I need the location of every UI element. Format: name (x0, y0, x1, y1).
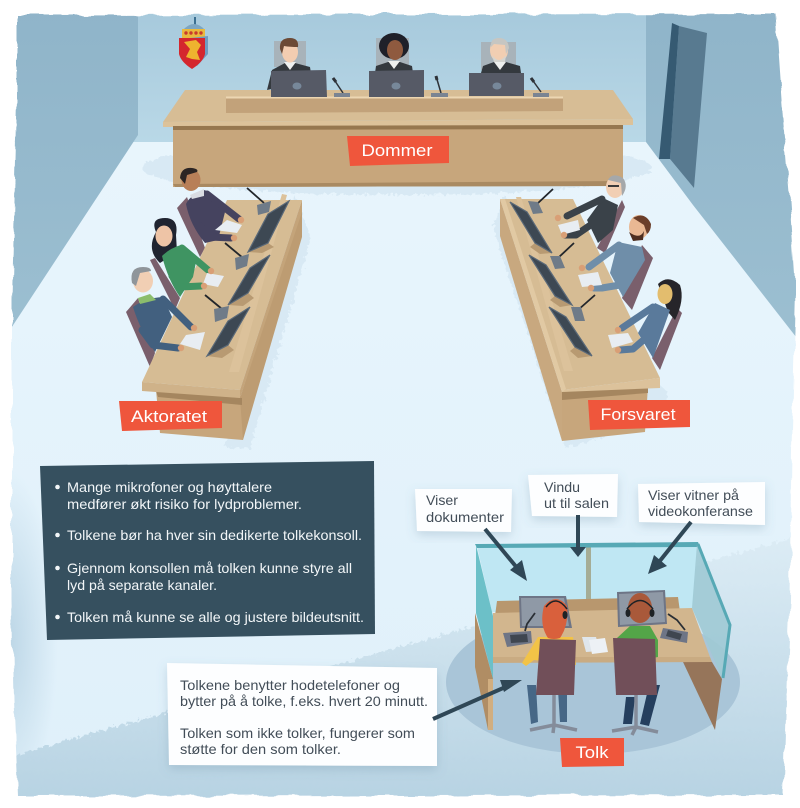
callout: interpreter routine: Tolken som ikke tolker, fungerer som (180, 725, 415, 741)
callout: video conference: videokonferanse (648, 503, 753, 519)
person 1 (180, 168, 239, 243)
microphones (528, 189, 595, 321)
label: Tolk: Tolk (576, 743, 609, 762)
prosecution chairs (126, 197, 205, 367)
person 1 (565, 175, 626, 243)
panel: key points (40, 461, 375, 640)
defence chairs (597, 200, 682, 370)
bullet list: Gjennom konsollen må tolken kunne styre all (67, 560, 352, 576)
window post (586, 547, 591, 599)
callout: video conference (638, 482, 765, 525)
label: Aktoratet (119, 401, 222, 431)
interpreter left (522, 599, 577, 733)
desk top (493, 608, 710, 657)
label: Forsvaret (588, 400, 690, 430)
table base (500, 199, 648, 441)
hands (178, 217, 244, 351)
monitor stands (530, 243, 592, 358)
divider strip (229, 194, 287, 372)
person 3 (620, 279, 682, 358)
monitors (510, 202, 592, 356)
callout: interpreter routine (167, 663, 437, 766)
callout: window: ut til salen (544, 495, 609, 511)
callout: window: Vindu (544, 479, 580, 495)
judge 2 (375, 33, 413, 73)
interpreter right (612, 593, 660, 735)
papers (180, 220, 242, 350)
console right (660, 614, 688, 643)
monitor stands (207, 243, 274, 358)
table base (156, 205, 302, 440)
glass right (692, 544, 730, 678)
label: Tolk (560, 738, 624, 767)
callout: documents: dokumenter (426, 509, 504, 525)
laptop 3 (469, 73, 524, 96)
laptop 1 (271, 70, 327, 97)
coat of arms (179, 17, 208, 69)
bullet list (55, 479, 364, 625)
label: Forsvaret: Forsvaret (600, 405, 676, 424)
arrow: interpreter routine (433, 680, 522, 719)
label: Dommer (347, 136, 449, 166)
arrow: window (570, 515, 586, 557)
label: Aktoratet: Aktoratet (131, 407, 207, 426)
console left (503, 613, 535, 647)
callout: window (528, 474, 618, 517)
hands (555, 215, 621, 353)
label: Dommer: Dommer (362, 141, 433, 160)
table top (142, 200, 302, 390)
divider strip (516, 197, 573, 371)
side panel left (475, 613, 493, 730)
callout: interpreter routine: støtte for den som tolker. (180, 741, 341, 757)
booth floor shadow (446, 610, 740, 754)
callout: documents: Viser (426, 492, 458, 508)
left wall (0, 0, 138, 345)
person 2 (152, 218, 208, 297)
bullet list: Mange mikrofoner og høyttalere (67, 479, 272, 495)
callout: video conference: Viser vitner på (648, 487, 739, 503)
panel: defence table (500, 175, 682, 441)
microphones (333, 76, 549, 97)
person 2 (589, 215, 651, 297)
panel: interpreter booth (446, 542, 740, 754)
table top (500, 199, 660, 390)
back window (477, 546, 697, 612)
bullet list: Tolkene bør ha hver sin dedikerte tolkekonsoll. (67, 527, 362, 543)
microphones (205, 188, 271, 322)
background: left floor vignette (0, 470, 58, 808)
glass left (476, 545, 493, 679)
back wall (130, 0, 655, 142)
laptop 2 (369, 70, 424, 97)
panel: prosecution table (126, 168, 302, 440)
desk back (495, 597, 680, 616)
right wall (646, 0, 800, 342)
bullet list: lyd på separate kanaler. (67, 577, 217, 593)
judge 3 (481, 38, 521, 73)
bullet list: medfører økt risiko for lydproblemer. (67, 496, 302, 512)
door (659, 23, 707, 188)
panel: judges (267, 33, 521, 90)
callout: documents (415, 489, 512, 532)
monitor right (617, 590, 667, 627)
monitors (207, 201, 289, 356)
side panel right (683, 662, 722, 730)
papers (558, 220, 633, 348)
arrow: documents (485, 529, 527, 581)
papers (582, 637, 608, 654)
background: lower floor band (0, 536, 800, 808)
monitor left (519, 596, 572, 628)
callout: interpreter routine: Tolkene benytter hodetelefoner og (180, 677, 400, 693)
window frame top (475, 542, 700, 548)
callout: interpreter routine: bytter på å tolke, f.eks. hvert 20 minutt. (180, 693, 428, 709)
bullet list: Tolken må kunne se alle og justere bildeutsnitt. (67, 609, 364, 625)
judge 1 (267, 38, 312, 90)
arrow: video conference (648, 522, 691, 574)
person 3 (131, 267, 191, 352)
judges' bench (163, 70, 633, 187)
floor shadows under tables (142, 141, 668, 448)
